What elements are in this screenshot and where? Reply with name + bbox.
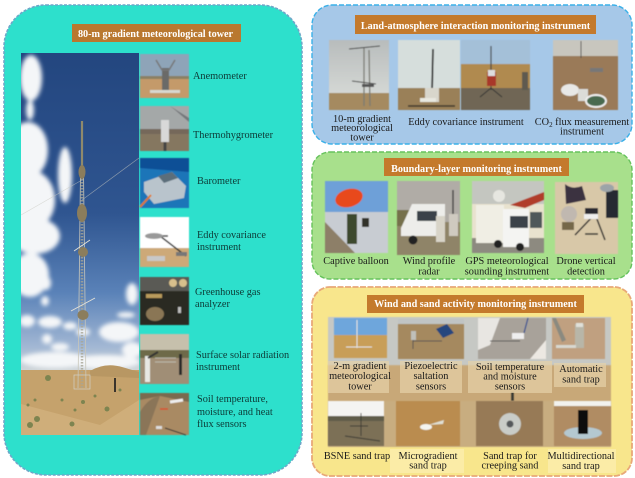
label: CO2 flux instrument: instrument — [560, 126, 604, 138]
photo: drone vertical detection — [555, 182, 618, 254]
label: BSNE sand trap: BSNE sand trap — [324, 451, 390, 462]
panel: 80-m gradient meteorological tower — [4, 5, 302, 475]
label: piezoelectric sensors: Piezoelectric — [404, 361, 458, 372]
heading: land-atmosphere: Land-atmosphere interaction monitoring instrument — [361, 21, 591, 32]
label: 10-m gradient tower: meteorological — [331, 123, 393, 134]
heading: 80-m tower: 80-m gradient meteorological tower — [78, 29, 234, 40]
photo: greenhouse gas analyzer — [140, 277, 189, 325]
label: microgradient sand trap: Microgradient — [399, 451, 458, 462]
label: drone detection: detection — [567, 266, 605, 278]
photo: 80-m tower in desert — [5, 53, 142, 435]
label: greenhouse gas analyzer: analyzer — [195, 299, 230, 310]
photo: sand trap for creeping sand — [476, 401, 543, 446]
photo: eddy covariance instrument — [140, 217, 189, 267]
label: 2-m gradient tower: 2-m gradient — [334, 361, 387, 372]
heading: wind and sand — [367, 295, 584, 313]
panel: land-atmosphere interaction monitoring instrument — [312, 5, 632, 144]
label: thermohygrometer: Thermohygrometer — [193, 130, 274, 141]
label: CO2 flux instrument: flux measurement — [553, 117, 629, 128]
label: multidirectional sand trap: sand trap — [562, 461, 600, 472]
photo: piezoelectric saltation sensors — [398, 319, 464, 359]
label: soil sensors: moisture, and heat — [197, 407, 273, 418]
label: surface solar radiation instrument: instrument — [196, 362, 240, 373]
panel: wind and sand activity monitoring instrument — [312, 287, 632, 476]
label: 10-m gradient tower: tower — [350, 132, 374, 144]
label: drone detection: Drone vertical — [556, 256, 616, 267]
label: captive balloon: Captive balloon — [323, 256, 389, 267]
heading: land-atmosphere — [355, 15, 596, 34]
photo: automatic sand trap — [552, 318, 605, 359]
label: piezoelectric sensors: saltation — [414, 371, 448, 382]
photo: 10-m gradient tower — [329, 40, 389, 110]
photo: soil sensors — [140, 393, 189, 435]
label: CO2 flux instrument: CO — [535, 117, 629, 129]
label: sand trap for creeping sand: Sand trap for — [483, 451, 537, 462]
photo: surface solar radiation instrument — [140, 334, 189, 384]
label: microgradient sand trap: sand trap — [409, 460, 447, 472]
label: surface solar radiation instrument: Surface solar radiation — [196, 350, 289, 361]
label: soil temperature and moisture sensors — [468, 361, 552, 393]
heading: boundary-layer — [384, 158, 569, 176]
photo: 2-m gradient tower — [334, 318, 387, 358]
label: wind profile radar: Wind profile — [403, 256, 456, 267]
label: piezoelectric sensors: sensors — [416, 382, 446, 392]
label: anemometer: Anemometer — [193, 71, 247, 82]
label: microgradient sand trap — [390, 449, 464, 473]
label: automatic sand trap: sand trap — [562, 374, 600, 386]
label: automatic sand trap — [554, 363, 606, 387]
photo: thermohygrometer — [140, 106, 189, 151]
label: soil temperature and moisture sensors: sensors — [495, 382, 525, 392]
label: multidirectional sand trap — [548, 449, 616, 473]
photo: eddy covariance right — [461, 40, 530, 110]
label: soil sensors: Soil temperature, — [197, 394, 268, 405]
photo: sand background — [328, 317, 611, 447]
photo: captive balloon — [325, 181, 388, 253]
label: barometer: Barometer — [197, 176, 241, 187]
photo: anemometer — [140, 54, 189, 98]
label: soil temperature and moisture sensors: Soil temperature — [476, 362, 545, 373]
heading: 80-m tower — [72, 24, 241, 42]
label: greenhouse gas analyzer: Greenhouse gas — [195, 287, 260, 298]
panel: boundary-layer monitoring instrument — [312, 152, 632, 279]
heading: boundary-layer: Boundary-layer monitoring instrument — [391, 164, 562, 175]
label: eddy covariance instrument: instrument — [197, 242, 241, 253]
photo: BSNE sand trap — [328, 401, 384, 446]
label: 2-m gradient tower: meteorological — [329, 371, 391, 382]
label: eddy covariance instrument: Eddy covariance — [197, 230, 266, 241]
photo: barometer — [140, 158, 189, 208]
label: soil sensors: flux sensors — [197, 419, 246, 430]
photo: GPS sounding truck — [472, 181, 544, 253]
label: 2-m gradient tower — [328, 361, 391, 393]
label: eddy covariance: Eddy covariance instrument — [408, 117, 524, 128]
label: 10-m gradient tower: 10-m gradient — [333, 114, 391, 125]
label: automatic sand trap: Automatic — [559, 364, 603, 375]
photo: CO2 flux instrument — [553, 40, 618, 110]
label: multidirectional sand trap: Multidirectional — [548, 451, 615, 462]
photo: eddy covariance left — [398, 40, 460, 110]
label: GPS sounding instrument: GPS meteorological — [465, 256, 549, 267]
icon: tower lattice — [71, 121, 95, 389]
label: soil temperature and moisture sensors: and moisture — [483, 372, 537, 382]
label: sand trap for creeping sand: creeping sand — [482, 460, 539, 472]
photo: soil temperature and moisture sensors — [478, 318, 546, 359]
label: CO2 flux instrument: 2 — [549, 121, 553, 129]
photo: microgradient sand trap — [396, 401, 460, 446]
photo: multidirectional sand trap — [554, 401, 611, 446]
label: wind profile radar: radar — [418, 266, 440, 278]
photo: wind profile radar — [397, 181, 460, 255]
label: GPS sounding instrument: sounding instrument — [465, 266, 549, 278]
label: 2-m gradient tower: tower — [348, 382, 372, 392]
heading: wind and sand: Wind and sand activity monitoring instrument — [374, 299, 577, 310]
label: piezoelectric sensors — [400, 361, 462, 393]
